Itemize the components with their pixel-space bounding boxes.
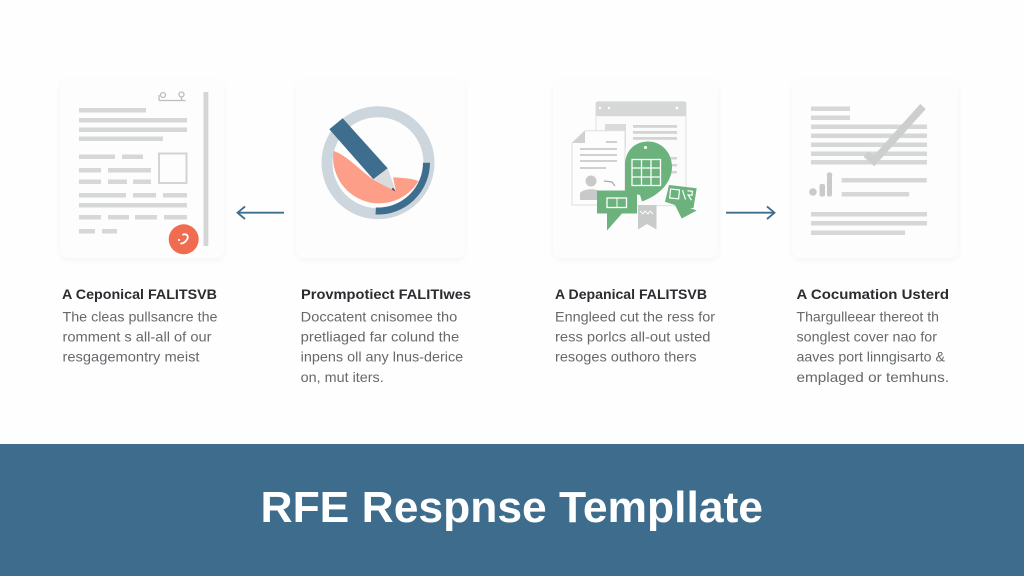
icon: vertical scroll bar xyxy=(204,92,208,246)
icon: text lines xyxy=(811,106,927,235)
text block: step 2: pretliaged far colund the xyxy=(301,328,459,344)
text block: step 2: on, mut iters. xyxy=(301,369,384,385)
icon: check mark xyxy=(866,106,923,161)
arrow: pointing left xyxy=(238,206,284,219)
text block: step 2 xyxy=(301,286,471,385)
text block: step 2: inpens oll any lnus-derice xyxy=(301,348,463,364)
panel: step 4 checklist document card xyxy=(792,80,958,258)
icon: small bar chart xyxy=(809,172,832,196)
text block: step 1: A Ceponical FALITSVB xyxy=(62,286,217,302)
icon: large green chat bubble with grid xyxy=(625,142,672,202)
text block: step 4: aaves port linngisarto & xyxy=(796,348,946,364)
text block: step 3: ress porlcs all-out usted xyxy=(555,328,710,344)
text block: step 3: A Depanical FALITSVB xyxy=(555,286,707,302)
text block: step 4: A Cocumation Usterd xyxy=(796,286,949,302)
text block: step 2: Doccatent cnisomee tho xyxy=(301,308,457,324)
text block: step 2: Provmpotiect FALITIwes xyxy=(301,286,471,302)
icon: bookmark ribbon xyxy=(638,205,656,230)
panel: step 1 document card xyxy=(60,80,224,258)
text block: step 4: Thargulleear thereot th xyxy=(796,308,939,324)
text block: step 4 xyxy=(796,286,949,385)
text block: step 1: resgagemontry meist xyxy=(62,348,200,364)
icon: document text lines xyxy=(79,108,187,234)
text block: step 3: resoges outhoro thers xyxy=(555,348,696,364)
panel: step 2 pencil card xyxy=(296,80,465,258)
icon: pencil xyxy=(329,118,396,192)
text block: step 1 xyxy=(62,286,218,364)
icon: grey ring xyxy=(327,112,429,214)
text block: step 3: Enngleed cut the ress for xyxy=(555,308,715,324)
icon: blue arc xyxy=(376,163,426,211)
text block: step 3 xyxy=(555,286,715,364)
panel: step 3 documents and chat card xyxy=(553,80,718,258)
icon: image placeholder square xyxy=(159,154,186,183)
icon: salmon segment xyxy=(333,151,418,203)
title: RFE Respnse Templlate xyxy=(260,483,763,532)
banner: title band xyxy=(0,444,1024,576)
icon: right green chat bubble xyxy=(665,185,697,218)
icon: lower-left green chat bubble xyxy=(597,190,637,230)
icon: orange phone badge xyxy=(169,224,199,254)
arrow: pointing right xyxy=(726,206,774,219)
text block: step 1: romment s all-all of our xyxy=(62,328,212,344)
icon: paper document with person xyxy=(572,131,625,205)
text block: step 4: songlest cover nao for xyxy=(796,328,937,344)
text block: step 4: emplaged or temhuns. xyxy=(796,369,949,385)
icon: clip marks xyxy=(159,92,186,100)
icon: browser window xyxy=(596,102,686,206)
text block: step 1: The cleas pullsancre the xyxy=(62,308,218,324)
